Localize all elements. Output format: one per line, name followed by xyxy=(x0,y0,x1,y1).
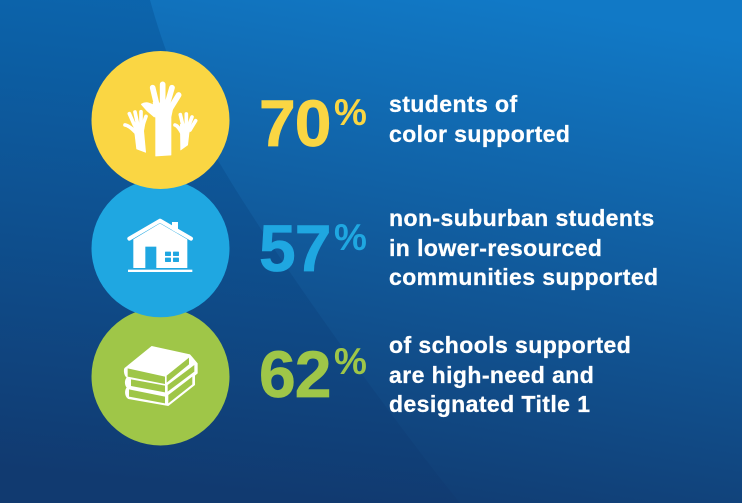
stat: 62% xyxy=(259,337,367,411)
stat: 57% xyxy=(259,211,367,285)
stat: 62%: % xyxy=(334,341,367,382)
icon: house xyxy=(128,221,192,272)
text: of schools supported: are high-need and xyxy=(389,362,594,388)
text: students of color supported xyxy=(389,91,570,148)
stat: 62%: 62 xyxy=(259,337,330,411)
icon: raised hands xyxy=(125,84,196,156)
text: non-suburban students: non-suburban students xyxy=(389,205,655,231)
stat: 70%: 70 xyxy=(259,86,330,160)
text: students of color supported: color supported xyxy=(389,120,570,146)
icon: books xyxy=(124,346,198,406)
text: of schools supported: of schools supported xyxy=(389,332,631,358)
stat: 70%: % xyxy=(334,92,367,133)
text: non-suburban students: in lower-resourced xyxy=(389,234,602,260)
text: of schools supported: designated Title 1 xyxy=(389,391,590,417)
stat: 70% xyxy=(259,86,367,160)
text: non-suburban students xyxy=(389,205,659,290)
text: students of color supported: students of xyxy=(389,91,518,117)
text: of schools supported xyxy=(389,332,631,418)
stat: 57%: 57 xyxy=(259,211,330,285)
stat: 57%: % xyxy=(334,217,367,258)
text: non-suburban students: communities supported xyxy=(389,264,659,290)
